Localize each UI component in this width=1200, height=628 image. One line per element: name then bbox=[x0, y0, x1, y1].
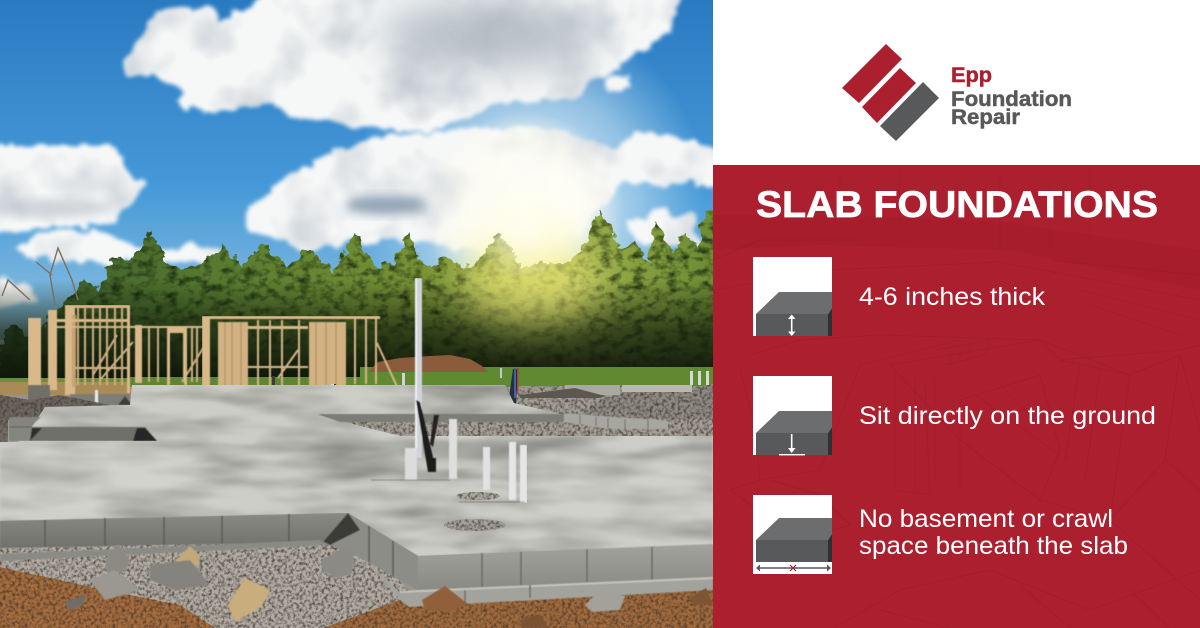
panel: slab foundations facts bbox=[713, 165, 1200, 628]
text: sits on ground: Sit directly on the ground bbox=[859, 402, 1156, 430]
icon: slab thickness bbox=[753, 257, 832, 336]
far pipes on slab bbox=[272, 373, 405, 385]
sky bbox=[0, 0, 713, 340]
tree line bbox=[0, 210, 720, 385]
icon: no basement or crawl space bbox=[753, 495, 832, 574]
sun glow bbox=[437, 118, 620, 268]
ground base bbox=[0, 395, 713, 592]
grass field and dirt mound bbox=[0, 355, 713, 395]
notch and retaining walls bbox=[9, 413, 668, 441]
text: no basement: No basement or crawl bbox=[859, 505, 1113, 533]
panel: construction site photo bbox=[0, 0, 720, 628]
left rubble bbox=[0, 395, 110, 442]
background gravel and low walls bbox=[500, 368, 713, 436]
clouds bbox=[0, 0, 720, 305]
logo wordmark bbox=[951, 64, 1072, 129]
logo wordmark: Foundation bbox=[951, 88, 1072, 111]
slab highlights bbox=[0, 443, 713, 545]
logo wordmark: Epp bbox=[951, 64, 992, 87]
icon: slab on ground bbox=[753, 376, 832, 455]
sun glow on trees bbox=[460, 238, 600, 322]
timber frame: left house bbox=[28, 305, 207, 405]
concrete slab bbox=[0, 385, 713, 556]
gravel pit behind slab bbox=[323, 416, 590, 436]
front slab edge walls bbox=[0, 513, 713, 607]
text: no basement bbox=[859, 505, 1128, 560]
icon: logo mark bbox=[842, 44, 939, 141]
logo wordmark: Repair bbox=[951, 106, 1020, 129]
timber frame: right house bbox=[202, 316, 398, 385]
rocks bbox=[65, 544, 713, 628]
gravel and dirt foreground bbox=[0, 540, 713, 628]
heading: SLAB FOUNDATIONS bbox=[756, 184, 1158, 225]
text: no basement: space beneath the slab bbox=[859, 532, 1128, 560]
tall standpipe and plumbing bbox=[371, 278, 527, 503]
panel: logo header bbox=[713, 0, 1200, 165]
text: thickness: 4-6 inches thick bbox=[859, 283, 1046, 311]
